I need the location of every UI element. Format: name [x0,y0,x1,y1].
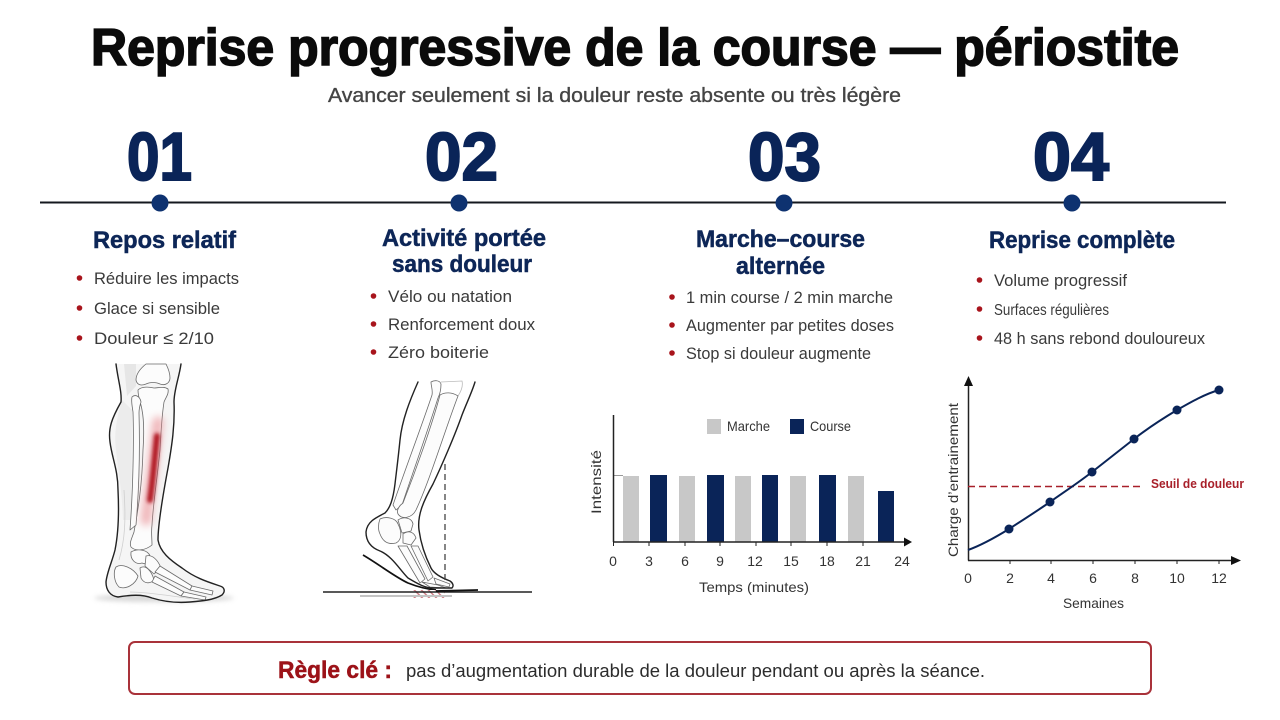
subtitle: Avancer seulement si la douleur reste absente ou très légère [328,85,901,107]
axis labels: 8 [1131,570,1139,586]
axis labels: 9 [716,553,724,569]
bar chart: walk run intervals: Intensité [588,450,604,514]
timeline [40,194,1226,212]
bullet list step 4: 48 h sans rebond douloureux [994,330,1206,348]
axis labels: 10 [1169,570,1185,586]
title: Reprise progressive de la course — périostite [91,19,1179,77]
progress curve [968,390,1219,550]
heading: activité portée sans douleur [382,225,546,278]
step number 03: 03 [748,119,821,195]
callout text: pas d’augmentation durable de la douleur pendant ou après la séance. [406,661,985,681]
heading: activité portée sans douleur: Activité portée [382,225,546,252]
axis labels: 2 [1006,570,1014,586]
step number 04: 04 [1033,119,1109,195]
line chart: training load: Charge d’entrainement [945,403,961,557]
legend: Course [810,418,851,434]
bullet list step 1 [77,270,239,348]
axis labels: 0 [964,570,972,586]
axis labels: 12 [1211,570,1227,586]
axis labels: 18 [819,553,835,569]
bullet list step 2: Renforcement doux [388,316,536,334]
axis labels: 6 [681,553,689,569]
bars [623,475,894,542]
step number 02: 02 [425,119,498,195]
legend [707,418,851,434]
legend: Marche [727,418,770,434]
line chart: training load [945,376,1244,611]
panel: step 3 marche-course [588,119,912,595]
axis labels: 21 [855,553,871,569]
heading: reprise complète: Reprise complète [989,227,1175,254]
heading: marche-course alternée: alternée [736,253,825,280]
axis labels: 4 [1047,570,1055,586]
callout label: Règle clé : [278,657,392,684]
axis labels [964,570,1227,586]
callout: key rule [129,642,1151,694]
bullet list step 4: Volume progressif [994,272,1127,290]
bullet list step 2 [371,288,536,362]
bullet list step 1: Douleur ≤ 2/10 [94,329,214,348]
bullet list step 3 [669,289,894,363]
bullet list step 2: Vélo ou natation [388,288,512,306]
bar chart: walk run intervals: Temps (minutes) [699,579,809,595]
bullet list step 4: Surfaces régulières [994,302,1109,319]
axis labels: 12 [747,553,763,569]
bullet list step 3: Stop si douleur augmente [686,345,871,363]
bullet list step 1: Réduire les impacts [94,270,239,288]
threshold label: Seuil de douleur [1151,477,1244,491]
line chart: training load: Semaines [1063,595,1124,611]
axis labels: 3 [645,553,653,569]
bullet list step 2: Zéro boiterie [388,344,489,362]
axis labels: 15 [783,553,799,569]
step number 01: 01 [127,119,192,195]
axis labels [609,553,910,569]
threshold line [968,486,1144,488]
bullet list step 4 [977,272,1206,348]
icon: side view foot lifting from ground [323,381,532,598]
bullet list step 1: Glace si sensible [94,300,220,318]
axis labels: 6 [1089,570,1097,586]
heading: repos relatif: Repos relatif [93,227,237,254]
panel: step 2 activité portée [323,119,546,598]
icon: front view leg with shin pain [94,364,234,602]
panel: step 4 reprise complète [945,119,1244,611]
axis labels: 24 [894,553,910,569]
axis labels: 0 [609,553,617,569]
data points [1004,386,1224,534]
heading: activité portée sans douleur: sans douleur [392,251,532,278]
bar chart: walk run intervals [588,415,912,595]
panel: step 1 repos relatif [77,119,239,602]
bullet list step 3: 1 min course / 2 min marche [686,289,893,307]
heading: marche-course alternée: Marche–course [696,226,865,253]
bullet list step 3: Augmenter par petites doses [686,317,894,335]
heading: marche-course alternée [696,226,865,280]
